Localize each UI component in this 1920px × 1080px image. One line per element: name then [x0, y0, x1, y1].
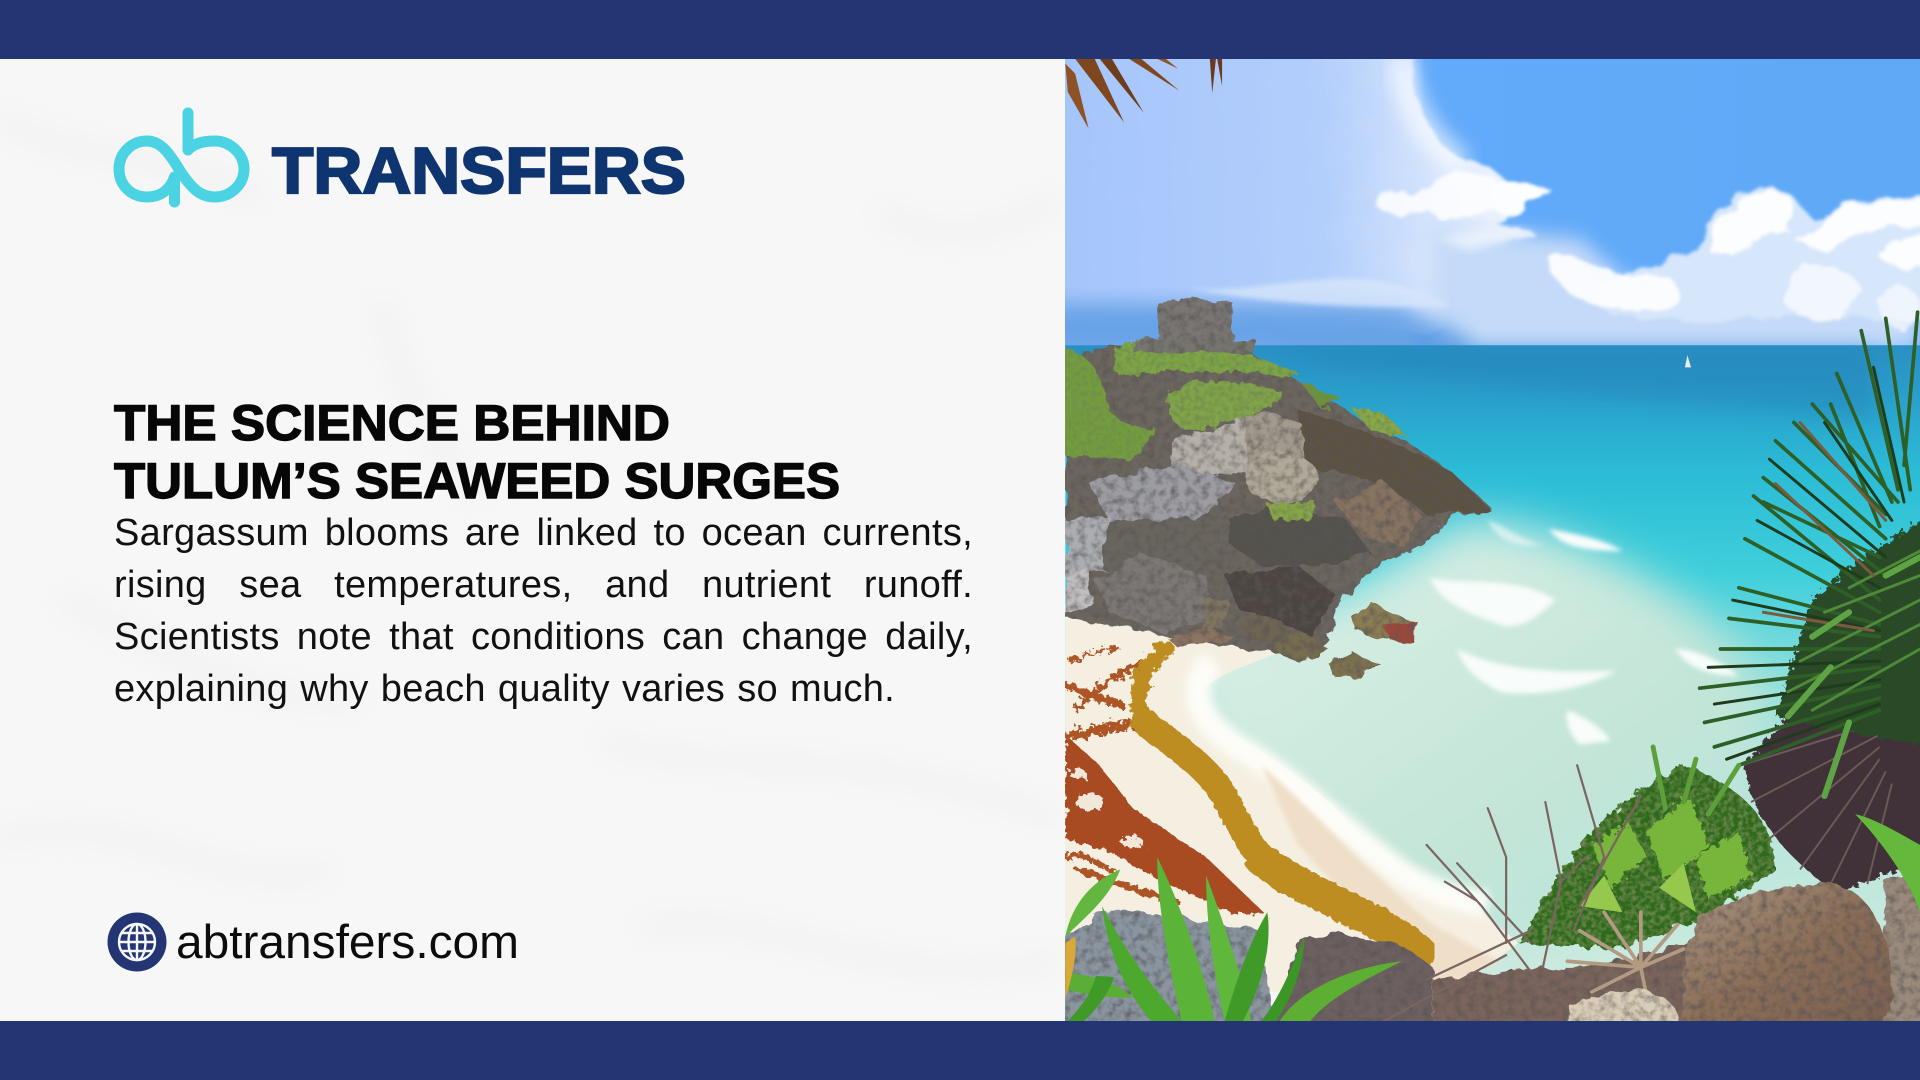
- hazy horizon band: [1041, 304, 1469, 355]
- body paragraph: rising sea temperatures, and nutrient runoff.: [114, 564, 973, 606]
- tower ruin: [1133, 298, 1255, 353]
- top navy band: [0, 0, 1920, 59]
- website icon: globe: [108, 912, 166, 972]
- dried fan palm: [1567, 912, 1684, 998]
- limestone cliff: [1065, 345, 1491, 661]
- big brown boulder: [1680, 884, 1892, 1029]
- sailboat: [1685, 355, 1691, 367]
- logo mark: infinity ab: [119, 113, 244, 202]
- sea: [1065, 345, 1920, 980]
- breaking waves: [1430, 520, 1739, 744]
- foreground spiky leaves: [1065, 814, 1920, 1021]
- heading: [114, 395, 840, 509]
- logo wordmark: TRANSFERS: [272, 134, 686, 207]
- cliff vegetation: [1059, 342, 1408, 520]
- body paragraph: explaining why beach quality varies so much.: [114, 668, 895, 710]
- palm fan right: [1700, 312, 1920, 894]
- heading: TULUM’S SEAWEED SURGES: [114, 453, 840, 509]
- pale boulder: [1567, 988, 1679, 1021]
- beach photo illustration: [1041, 37, 1920, 1029]
- heading: THE SCIENCE BEHIND: [114, 395, 670, 451]
- leafy shrub: [1518, 747, 1776, 949]
- bottom navy band: [0, 1021, 1920, 1080]
- pale haze under the clouds: [1433, 227, 1920, 350]
- website address: abtransfers.com: [176, 915, 519, 968]
- small flat cloud: [1188, 279, 1451, 307]
- logo: [119, 113, 686, 207]
- cumulus clouds: [1378, 173, 1920, 328]
- sargassum: golden mat: [1139, 649, 1420, 953]
- body paragraph: Scientists note that conditions can change daily,: [114, 616, 973, 658]
- deep water streak: [1273, 350, 1873, 422]
- wet sand and foam edge: [1065, 606, 1518, 992]
- body paragraph: Sargassum blooms are linked to ocean currents,: [114, 512, 973, 554]
- dry beach: [1261, 765, 1500, 992]
- sargassum: brown mats: [1065, 649, 1267, 916]
- shallow foamy water: [1206, 488, 1786, 851]
- boulders on shore: [1329, 600, 1418, 677]
- foreground ground cover: [1065, 876, 1920, 1021]
- bare twigs: [1384, 765, 1641, 1021]
- marble background panel: [0, 59, 1065, 1021]
- sky: [1065, 59, 1920, 346]
- palm frond top-left: [1065, 59, 1222, 129]
- body paragraph: [114, 512, 973, 710]
